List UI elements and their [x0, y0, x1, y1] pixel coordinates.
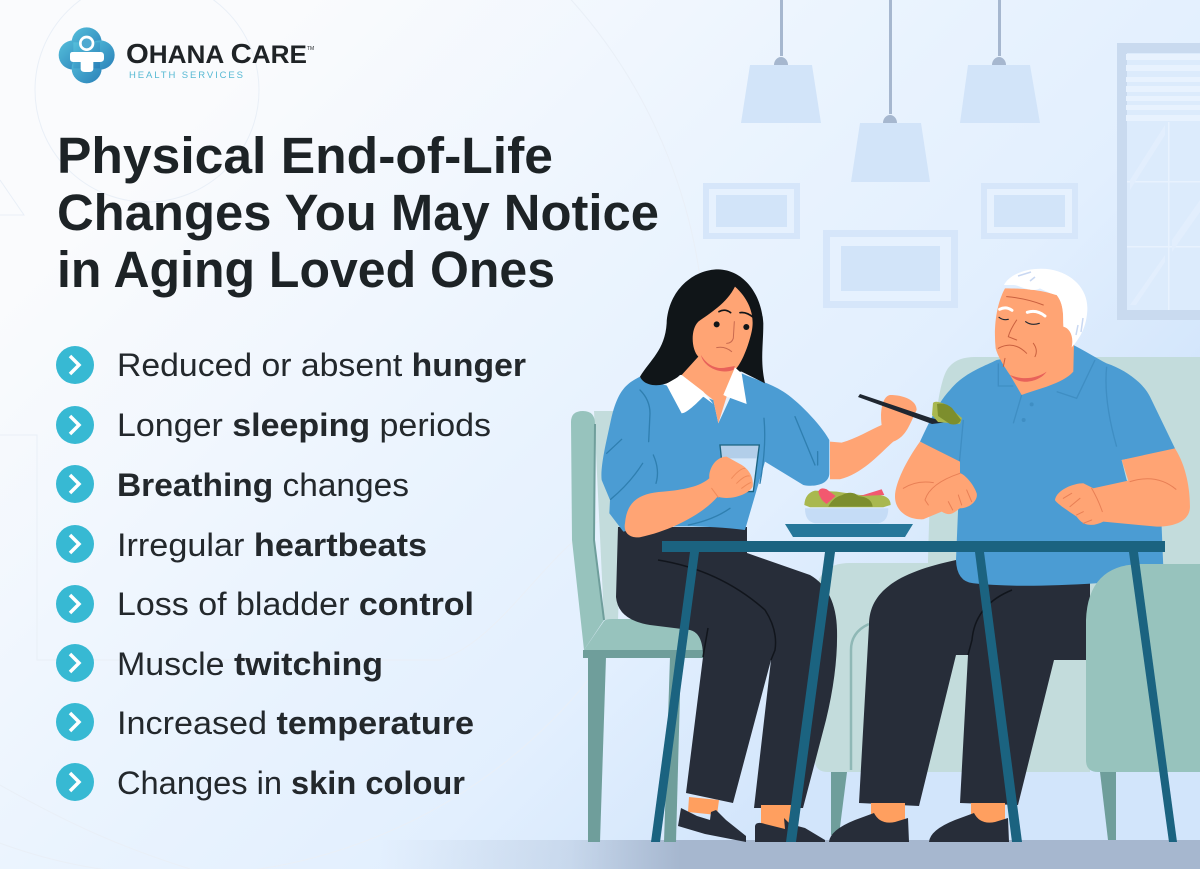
title [57, 127, 659, 298]
collar [666, 375, 713, 413]
title: Changes You May Notice [57, 184, 659, 241]
wall decor [703, 0, 1200, 320]
item: hunger: Reduced or absent hunger [117, 347, 526, 383]
eyebrows [1000, 308, 1045, 316]
logo wordmark: OHANA CARE [126, 38, 307, 69]
illustration: man's sofa [815, 357, 1200, 840]
trouser crease [968, 590, 1012, 655]
closed eyes, nose and mouth [999, 317, 1039, 324]
woman's upper body [601, 269, 917, 537]
title: in Aging Loved Ones [57, 241, 555, 298]
background line pattern [0, 0, 705, 869]
arm holding fork [830, 395, 917, 479]
illustration: woman's chair [571, 411, 704, 842]
illustration: armchair foreground [1086, 564, 1200, 772]
face [995, 288, 1074, 395]
chin shadow [1010, 372, 1047, 382]
illustration: table [651, 541, 1165, 842]
logo [59, 27, 314, 83]
title: Physical End-of-Life [57, 127, 553, 184]
item: temperature: Increased temperature [117, 705, 474, 741]
item: sleeping: Longer sleeping periods [117, 407, 491, 443]
water glass [720, 445, 759, 492]
illustration: food tray [785, 488, 913, 537]
logo icon [59, 27, 115, 83]
arm creases [903, 473, 1176, 523]
pendant lamps [741, 0, 1040, 182]
shirt folds [607, 390, 818, 525]
tray [785, 524, 913, 537]
trouser creases [658, 560, 776, 660]
item: breathing: Breathing changes [117, 467, 409, 503]
collar and placket [959, 360, 1117, 463]
logo trademark: TM [307, 46, 314, 52]
facial features [714, 321, 749, 330]
man's trousers [859, 560, 1090, 806]
illustration: woman [601, 269, 917, 842]
illustration: table leg over armchair [1129, 552, 1177, 842]
man's upper body [895, 269, 1190, 586]
list of physical changes [56, 346, 526, 801]
white hair [1004, 269, 1087, 347]
item: skin colour: Changes in skin colour [117, 765, 465, 801]
polo shirt [920, 345, 1175, 586]
hair [640, 269, 765, 385]
item: bladder control: Loss of bladder control [117, 586, 474, 622]
right arm [1055, 448, 1190, 527]
illustration: fork with food [858, 394, 962, 424]
item: twitching: Muscle twitching [117, 646, 383, 682]
picture frames [703, 183, 1078, 308]
logo tagline: HEALTH SERVICES [129, 70, 243, 81]
window [1117, 43, 1200, 320]
salad bowl [804, 488, 891, 523]
arm holding glass [625, 457, 753, 537]
shirt [601, 373, 829, 532]
man's shoes and ankles [829, 803, 1009, 842]
illustration: man [829, 269, 1190, 842]
hair strands [1018, 272, 1083, 335]
woman's shoes and ankles [678, 797, 825, 842]
floor [0, 840, 1200, 869]
face and neck [682, 287, 753, 423]
left arm [895, 442, 977, 519]
woman's trousers [616, 527, 837, 808]
item: heartbeats: Irregular heartbeats [117, 527, 427, 563]
